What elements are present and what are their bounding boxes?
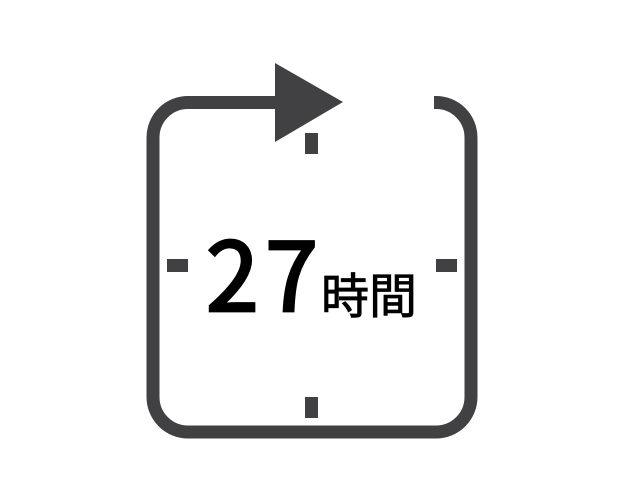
label: 27 hours bbox=[206, 202, 417, 339]
icon: arrow head bbox=[275, 63, 343, 142]
unit: 時間 bbox=[321, 257, 417, 327]
tick marks bbox=[167, 133, 457, 418]
rounded square clock outline bbox=[153, 102, 471, 432]
number 27: 27 bbox=[206, 202, 318, 339]
